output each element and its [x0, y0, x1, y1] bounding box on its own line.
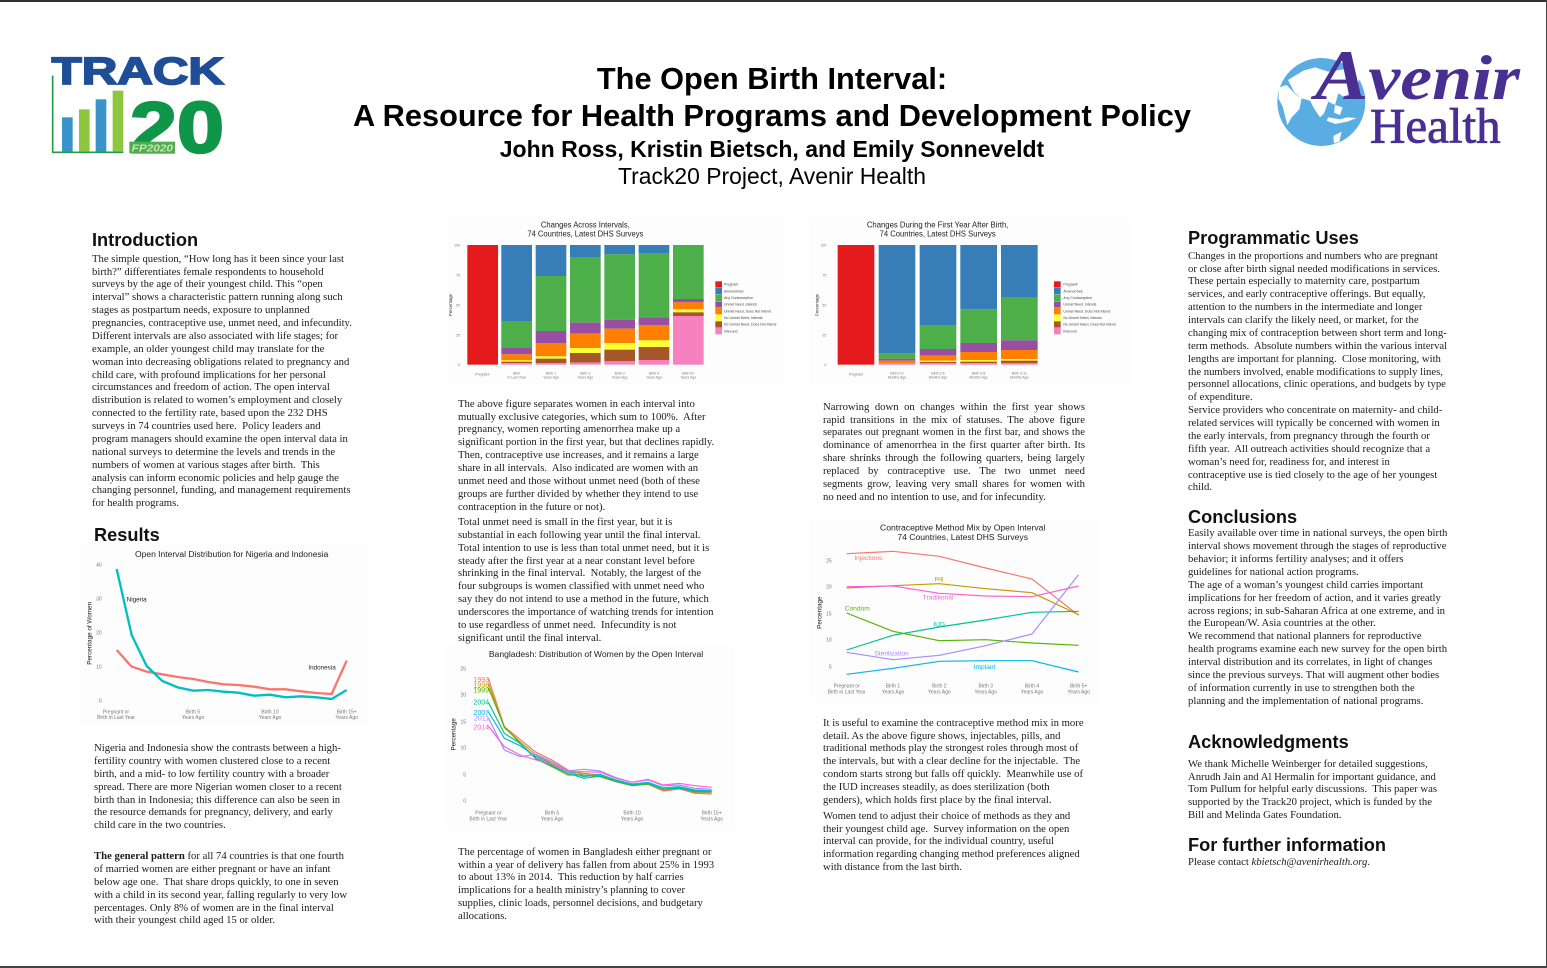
text: conclusions: Easily available over time in national surveys, the open birth	[1188, 527, 1447, 539]
text: Nigeria and Indonesia contrast: Nigeria and Indonesia show the contrasts between a high-	[94, 742, 341, 754]
text: unmet need: substantial in each following year until the final interval.	[458, 529, 700, 541]
line chart: contraceptive method mix: Years Ago	[974, 690, 997, 696]
stacked bar chart: changes across intervals: Birth	[513, 371, 520, 375]
line chart: Nigeria and Indonesia: Years Ago	[335, 715, 358, 721]
line chart: Nigeria and Indonesia: 40	[96, 563, 102, 569]
text: programmatic uses: intervals can clarify the likely need, or market, for the	[1188, 314, 1419, 326]
text: unmet need: Total unmet need is small in the first year, but it is	[458, 516, 672, 528]
stacked bar chart: changes across intervals: 74 Countries, Latest DHS Surveys	[527, 229, 643, 238]
text: conclusions: since the previous surveys. That will augment other bodies	[1188, 669, 1439, 681]
text: figure explanation: unmet need and those without unmet need (both of these	[458, 475, 700, 487]
text: unmet need	[458, 516, 714, 644]
line chart: Bangladesh: Years Ago	[541, 817, 564, 823]
text: figure explanation: share in all intervals. Also indicated are women with an	[458, 462, 698, 474]
text: introduction: birth?” differentiates female respondents to household	[92, 266, 324, 278]
text: general pattern: with their youngest child aged 15 or older.	[94, 914, 275, 926]
line chart: Bangladesh: 15	[460, 719, 466, 725]
legend: No Unmet Need, Intends	[724, 316, 763, 320]
stacked bar chart: first year after birth: 25	[822, 333, 826, 337]
text: conclusions: behavior; it informs fertility analyses; and it offers	[1188, 553, 1404, 565]
line chart: contraceptive method mix: Birth 5+	[1070, 684, 1087, 690]
text: programmatic uses: related services will typically be concerned with women in	[1188, 417, 1440, 429]
stacked bar chart: first year after birth: 50	[822, 303, 826, 307]
text: conclusions	[1188, 527, 1448, 707]
text: contact: Please contact kbietsch@avenirhealth.org.	[1188, 856, 1370, 868]
text: conclusions: across regions; in sub-Saharan Africa at one extreme, and in	[1188, 605, 1445, 617]
bars	[838, 245, 1038, 365]
heading: Results: Results	[94, 525, 160, 545]
text: programmatic uses: child.	[1188, 481, 1212, 493]
text: programmatic uses: These pertain especially to maternity care, postpartum	[1188, 275, 1420, 287]
text: Nigeria and Indonesia contrast: birth, and a mid- to low fertility country with a broader	[94, 768, 329, 780]
line chart: Nigeria and Indonesia: Years Ago	[182, 715, 205, 721]
stacked bar chart: first year after birth: Percentage	[814, 293, 819, 316]
text: programmatic uses: the early intervals, from pregnancy through the fourth or	[1188, 430, 1430, 442]
stacked bar chart: first year after birth	[814, 221, 1116, 380]
line chart: contraceptive method mix: Implant	[974, 664, 996, 671]
logo: Track20: TRACK	[52, 51, 225, 93]
text: programmatic uses: attention to the numbers in the intermediate and longer	[1188, 301, 1422, 313]
text: first year transitions	[823, 401, 1085, 503]
logo: Avenir Health	[1277, 37, 1522, 154]
text: introduction: child care, with profound implications for her personal	[92, 369, 326, 381]
text: first year transitions: separates out pregnant women in the first bar, and shows the	[823, 426, 1085, 438]
stacked bar chart: first year after birth: Changes During the First Year After Birth,	[867, 221, 1009, 230]
stacked bar chart: first year after birth: Months Ago	[929, 376, 947, 380]
text: introduction: numbers of women at various stages after birth. This	[92, 459, 320, 471]
text: first year transitions: rapid transitions in the mix of statuses. The above figure	[823, 414, 1085, 426]
line chart: contraceptive method mix: Condom	[845, 606, 870, 613]
line chart: Bangladesh: Years Ago	[700, 817, 723, 823]
text: conclusions: health programs examine each new survey for the open birth	[1188, 643, 1447, 655]
line chart: contraceptive method mix: 25	[826, 558, 832, 564]
text: programmatic uses: Changes in the proportions and numbers who are pregnant	[1188, 250, 1438, 262]
text: method mix detail: condom starts strong but falls off quickly. Meanwhile use of	[823, 768, 1083, 780]
stacked bar chart: changes across intervals: 75	[456, 273, 460, 277]
line chart: contraceptive method mix: Birth in Last Year	[828, 690, 866, 696]
legend: Infecund	[724, 329, 737, 333]
text: introduction: The simple question, “How long has it been since your last	[92, 253, 344, 265]
text: introduction: example, an older youngest child may translate for the	[92, 343, 324, 355]
text: programmatic uses: woman’s need for, readiness for, and interest in	[1188, 456, 1390, 468]
line chart: Bangladesh: 1993	[473, 677, 489, 684]
text: unmet need: shrinking in the final interval. Notably, the largest of the	[458, 567, 701, 579]
line chart: Nigeria and Indonesia: Nigeria	[127, 597, 147, 604]
stacked bar chart: first year after birth: Months Ago	[1010, 376, 1029, 380]
line chart: Bangladesh: 5	[463, 772, 466, 778]
stacked bar chart: first year after birth: Birth 9-11	[1012, 371, 1027, 375]
legend: No Unmet Need, Does Not Intend	[1063, 323, 1116, 327]
logo: Avenir Health: Health	[1370, 99, 1501, 154]
line chart: contraceptive method mix: Years Ago	[928, 690, 951, 696]
text: conclusions: The age of a woman’s youngest child carries important	[1188, 579, 1423, 591]
text: programmatic uses	[1188, 250, 1447, 493]
line chart: Nigeria and Indonesia: 0	[99, 699, 102, 705]
line chart: contraceptive method mix: IUD	[933, 621, 945, 628]
line chart: Nigeria and Indonesia: Open Interval Distribution for Nigeria and Indonesia	[135, 550, 329, 559]
text: conclusions: We recommend that national planners for reproductive	[1188, 630, 1422, 642]
stacked bar chart: first year after birth: 100	[820, 243, 826, 247]
line chart: Bangladesh: Years Ago	[621, 817, 644, 823]
line chart: contraceptive method mix: Pill	[935, 576, 944, 583]
stacked bar chart: changes across intervals: 100	[454, 243, 460, 247]
line chart: Bangladesh: 0	[463, 799, 466, 805]
text: general pattern: of married women are either pregnant or have an infant	[94, 863, 331, 875]
text: adjusting methods: their youngest child age. Survey information on the open	[823, 823, 1069, 835]
line chart: Bangladesh: 10	[460, 746, 466, 752]
title: The Open Birth Interval:	[597, 61, 947, 96]
text: programmatic uses: fifth year. All outreach activities should recognize that a	[1188, 443, 1430, 455]
stacked bar chart: changes across intervals: Percentage	[448, 293, 453, 316]
line chart: Nigeria and Indonesia: Birth in Last Year	[97, 715, 135, 721]
affiliation: Track20 Project, Avenir Health	[618, 163, 926, 189]
text: figure explanation: significant portion in the first year, but that declines rapidly.	[458, 436, 714, 448]
text: introduction: changing personnel, funding, and management requirements	[92, 484, 350, 496]
text: adjusting methods: with distance from the last birth.	[823, 861, 962, 873]
text: method mix detail: genders), which holds first place by the final interval.	[823, 794, 1052, 806]
text: programmatic uses: term methods. Absolute numbers within the various interval	[1188, 340, 1447, 352]
text: first year transitions: dominance of amenorrhea in the first quarter after birth. Its	[823, 439, 1085, 451]
text: general pattern: The general pattern for all 74 countries is that one fourth	[94, 850, 344, 862]
text: unmet need: Total intention to use is less than total unmet need, but it is	[458, 542, 709, 554]
line chart: Bangladesh: Percentage	[451, 718, 458, 751]
line chart: contraceptive method mix	[817, 524, 1090, 696]
text: Nigeria and Indonesia contrast: birth than in Indonesia; this difference can also be seen in	[94, 794, 340, 806]
line chart: Nigeria and Indonesia: Indonesia	[308, 664, 336, 671]
line chart: Nigeria and Indonesia	[87, 550, 358, 721]
heading: Acknowledgments: Acknowledgments	[1188, 732, 1349, 752]
text: acknowledgments: We thank Michelle Weinberger for detailed suggestions,	[1188, 758, 1428, 770]
text: acknowledgments: Anrudh Jain and Al Hermalin for important guidance, and	[1188, 771, 1436, 783]
text: first year transitions: Narrowing down on changes within the first year shows	[823, 401, 1085, 413]
line chart: contraceptive method mix: 10	[826, 638, 832, 644]
stacked bar chart: first year after birth: Birth 3-5	[931, 371, 945, 375]
text: conclusions: the European/W. Asia countries at the other.	[1188, 617, 1376, 629]
text: Bangladesh: allocations.	[458, 910, 507, 922]
legend: Pregnant	[724, 283, 738, 287]
text: Bangladesh: The percentage of women in Bangladesh either pregnant or	[458, 846, 711, 858]
stacked bar chart: changes across intervals: Years Ago	[577, 376, 593, 380]
text: conclusions: implications for her freedom of action, and it varies greatly	[1188, 592, 1441, 604]
text: acknowledgments: Tom Pullum for helpful early discussions. This paper was	[1188, 783, 1437, 795]
text: introduction: interval” shows a characteristic pattern running along such	[92, 291, 343, 303]
stacked bar chart: changes across intervals: 50	[456, 303, 460, 307]
stacked bar chart: first year after birth: Birth 0-2	[890, 371, 904, 375]
line chart: contraceptive method mix: Years Ago	[1021, 690, 1044, 696]
text: adjusting methods: interval can provide, for the individual country, useful	[823, 835, 1054, 847]
text: unmet need: four subgroups is women classified with unmet need who	[458, 580, 704, 592]
line chart: Bangladesh: 1999	[473, 688, 489, 695]
stacked bar chart: first year after birth: Months Ago	[969, 376, 988, 380]
line chart: Nigeria and Indonesia: Birth 5	[186, 709, 200, 715]
text: programmatic uses: Service providers who concentrate on maternity- and child-	[1188, 404, 1442, 416]
logo: Track20: 20	[130, 88, 224, 169]
legend: Infecund	[1063, 329, 1077, 333]
text: Nigeria and Indonesia contrast	[94, 742, 342, 831]
legend: Pregnant	[1063, 283, 1078, 287]
heading: Conclusions: Conclusions	[1188, 506, 1297, 526]
text: introduction: surveys by the age of their youngest child. This “open	[92, 278, 323, 290]
logo: Track20: FP2020	[132, 143, 173, 154]
text: introduction: distribution is related to women’s employment and closely	[92, 394, 342, 406]
text: unmet need: to use regardless of unmet need. Infecundity is not	[458, 619, 676, 631]
text: introduction: analysis can inform economic policies and help gauge the	[92, 472, 339, 484]
line chart: Bangladesh: 2007	[473, 710, 489, 717]
line chart: Nigeria and Indonesia: 10	[96, 665, 102, 671]
title: A Resource for Health Programs and Development Policy	[353, 98, 1191, 133]
text: first year transitions: no need and no intention to use, and for infecundity.	[823, 491, 1046, 503]
text: Nigeria and Indonesia contrast: fertility country with women clustered close to a recent	[94, 755, 330, 767]
text: unmet need: significant until the final interval.	[458, 632, 601, 644]
line chart: contraceptive method mix: Birth 4	[1025, 684, 1039, 690]
text: adjusting methods: Women tend to adjust their choice of methods as they and	[823, 810, 1070, 822]
text: introduction: woman into decreasing obligations related to pregnancy and	[92, 356, 349, 368]
stacked bar chart: changes across intervals: Pregnant	[475, 372, 489, 376]
text: general pattern: below age one. That share drops quickly, to one in seven	[94, 876, 339, 888]
text: figure explanation: mutually exclusive categories, which sum to 100%. After	[458, 411, 706, 423]
text: Bangladesh: within a year of delivery has fallen from about 25% in 1993	[458, 859, 714, 871]
text: figure explanation: The above figure separates women in each interval into	[458, 398, 695, 410]
legend: Unmet Need, Intends	[1063, 303, 1097, 307]
stacked bar chart: changes across intervals: Birth 5+	[682, 371, 694, 375]
stacked bar chart: changes across intervals: Birth 1	[546, 371, 556, 375]
stacked bar chart: changes across intervals: Birth 4	[649, 371, 659, 375]
text: general pattern: with a child in its second year, falling regularly to very low	[94, 889, 347, 901]
stacked bar chart: changes across intervals: 0	[458, 363, 460, 367]
text: acknowledgments: supported by the Track20 project, which is funded by the	[1188, 796, 1432, 808]
line chart: Nigeria and Indonesia: 30	[96, 597, 102, 603]
stacked bar chart: changes across intervals: Years Ago	[680, 376, 696, 380]
line chart: Bangladesh: Bangladesh: Distribution of Women by the Open Interval	[489, 650, 703, 659]
stacked bar chart: first year after birth: Months Ago	[888, 376, 906, 380]
text: programmatic uses: lengths are important for planning. Close monitoring, with	[1188, 353, 1441, 365]
stacked bar chart: changes across intervals	[448, 221, 776, 380]
stacked bar chart: changes across intervals: in Last Year	[508, 376, 527, 380]
text: introduction: surveys in 74 countries used here. Policy leaders and	[92, 420, 321, 432]
text: Bangladesh: to about 13% in 2014. This reduction by half carries	[458, 871, 684, 883]
text: conclusions: interval distribution and its correlates, in light of changes	[1188, 656, 1432, 668]
bars	[467, 245, 704, 365]
title	[353, 61, 1191, 133]
text: introduction: circumstances and freedom of action. The open interval	[92, 381, 330, 393]
text: introduction: pregnancies, contraceptive use, unmet need, and infecundity.	[92, 317, 352, 329]
line chart: contraceptive method mix: Contraceptive Method Mix by Open Interval	[880, 524, 1046, 533]
stacked bar chart: first year after birth: Birth 6-8	[972, 371, 985, 375]
line chart: Nigeria and Indonesia: Pregnant or	[103, 709, 129, 715]
line chart: contraceptive method mix: Sterilization	[874, 650, 909, 657]
legend: Unmet Need, Does Not Intend	[1063, 309, 1110, 313]
text: programmatic uses: personnel allocations, clinic operations, and budgets by type	[1188, 378, 1446, 390]
text: acknowledgments: Bill and Melinda Gates Foundation.	[1188, 809, 1341, 821]
line chart: Nigeria and Indonesia: Birth 15+	[337, 709, 357, 715]
text: Bangladesh: supplies, clinic loads, personnel decisions, and budgetary	[458, 897, 703, 909]
legend: Unmet Need, Does Not Intend	[724, 309, 771, 313]
text: figure explanation: contraception in the future or not).	[458, 501, 605, 513]
text: figure explanation: groups are further divided by whether they intend to use	[458, 488, 698, 500]
text: programmatic uses: the numbers involved, enable modifications to supply lines,	[1188, 366, 1443, 378]
stacked bar chart: changes across intervals: Changes Across Intervals,	[541, 221, 630, 230]
text: method mix detail: the intervals, but with a clear decline for the injectable. The	[823, 755, 1080, 767]
text: general pattern: percentages. Only 8% of women are in the final interval	[94, 902, 334, 914]
text: programmatic uses: of expenditure.	[1188, 391, 1253, 403]
text: programmatic uses: contraceptive use is tied closely to the age of her youngest	[1188, 469, 1437, 481]
line chart: Bangladesh: Birth in Last Year	[469, 817, 508, 823]
line chart: Bangladesh: Birth 10	[623, 811, 641, 817]
line chart: Bangladesh: 2004	[473, 700, 489, 707]
text: introduction: national surveys to determine the levels and trends in the	[92, 446, 335, 458]
line chart: contraceptive method mix: Percentage	[817, 596, 824, 629]
legend: No Unmet Need, Intends	[1063, 316, 1102, 320]
text: programmatic uses: services, and early contraceptive offerings. But equally,	[1188, 288, 1425, 300]
text: introduction	[92, 253, 352, 509]
line chart: contraceptive method mix: 15	[826, 611, 832, 617]
line chart: Nigeria and Indonesia: 20	[96, 631, 102, 637]
line chart: contraceptive method mix: 74 Countries, Latest DHS Surveys	[897, 533, 1028, 542]
text: conclusions: planning and the implementation of national programs.	[1188, 695, 1423, 707]
line chart: contraceptive method mix: Injections	[854, 555, 883, 562]
text: figure explanation	[458, 398, 714, 513]
logo: Track20	[51, 51, 226, 169]
line chart: contraceptive method mix: Birth 2	[932, 684, 947, 690]
line chart: Bangladesh	[451, 650, 723, 823]
text: introduction: program managers should examine the open interval data in	[92, 433, 348, 445]
legend	[1054, 281, 1116, 334]
text: first year transitions: replaced by contraceptive use. The two unmet need	[823, 465, 1085, 477]
text: unmet need: say they do not intend to use a method in the future, which	[458, 593, 709, 605]
text: conclusions: guidelines for national action programs.	[1188, 566, 1359, 578]
line chart: Bangladesh: 1996	[473, 682, 489, 689]
legend: Any Contraception	[1063, 296, 1092, 300]
text: figure explanation: pregnancy, women reporting amenorrhea make up a	[458, 423, 680, 435]
line chart: contraceptive method mix: Birth 1	[886, 684, 900, 690]
line chart: Bangladesh: 2014	[473, 724, 489, 731]
stacked bar chart: changes across intervals: Years Ago	[543, 376, 559, 380]
stacked bar chart: changes across intervals: 25	[456, 333, 460, 337]
line chart: Nigeria and Indonesia: Birth 10	[261, 709, 279, 715]
text: introduction: for health programs.	[92, 497, 179, 509]
text: introduction: connected to the fertility rate, based upon the 232 DHS	[92, 407, 328, 419]
text: acknowledgments	[1188, 758, 1437, 821]
text: adjusting methods	[823, 810, 1080, 873]
line chart: Nigeria and Indonesia: Percentage of Women	[87, 601, 94, 665]
text: figure explanation: Then, contraceptive use increases, and it remains a large	[458, 449, 699, 461]
line chart: Bangladesh: 20	[460, 693, 466, 699]
stacked bar chart: changes across intervals: Years Ago	[646, 376, 662, 380]
line chart: contraceptive method mix: Traditional	[923, 595, 954, 602]
text: unmet need: underscores the importance of watching trends for intention	[458, 606, 714, 618]
legend: Amenorrheic	[1063, 289, 1083, 293]
line chart: Bangladesh: Pregnant or	[475, 811, 502, 817]
line chart: Bangladesh: Birth 5	[545, 811, 559, 817]
text: first year transitions: share shrinks through the following quarters, being largely	[823, 452, 1085, 464]
text: Bangladesh	[458, 846, 714, 922]
text: conclusions: interval shows movement through the stages of reproductive	[1188, 540, 1447, 552]
stacked bar chart: changes across intervals: Birth 3	[615, 371, 625, 375]
line chart: Nigeria and Indonesia: Years Ago	[259, 715, 282, 721]
text: method mix detail: the IUD increases steadily, as does sterilization (both	[823, 781, 1050, 793]
stacked bar chart: changes across intervals: Birth 2	[580, 371, 590, 375]
text: Bangladesh: implications for a health ministry’s planning to cover	[458, 884, 685, 896]
heading: Programmatic Uses: Programmatic Uses	[1188, 228, 1359, 248]
heading: For further information: For further information	[1188, 834, 1386, 854]
stacked bar chart: first year after birth: 0	[824, 363, 826, 367]
stacked bar chart: first year after birth: 74 Countries, Latest DHS Surveys	[880, 229, 996, 238]
legend: Unmet Need, Intends	[724, 303, 757, 307]
legend: Any Contraception	[724, 296, 753, 300]
text: Nigeria and Indonesia contrast: spread. There are more Nigerian women closer to a recent	[94, 781, 342, 793]
stacked bar chart: first year after birth: 75	[822, 273, 826, 277]
text: adjusting methods: information regarding changing method preferences aligned	[823, 848, 1080, 860]
text: method mix detail	[823, 717, 1084, 806]
text: programmatic uses: or close after birth signal needed modifications in services.	[1188, 263, 1440, 275]
legend: No Unmet Need, Does Not Intend	[724, 323, 776, 327]
heading: Introduction: Introduction	[92, 230, 198, 250]
text: introduction: Different intervals are also associated with life stages; for	[92, 330, 338, 342]
line chart: Bangladesh: 25	[460, 666, 466, 672]
stacked bar chart: first year after birth: Pregnant	[849, 372, 863, 376]
text: general pattern	[94, 850, 348, 926]
line chart: contraceptive method mix: Years Ago	[1067, 690, 1090, 696]
text: conclusions: of information currently in use to strengthen both the	[1188, 682, 1415, 694]
line chart: contraceptive method mix: Years Ago	[882, 690, 905, 696]
line chart: contraceptive method mix: Pregnant or	[834, 684, 860, 690]
text: method mix detail: It is useful to examine the contraceptive method mix in more	[823, 717, 1084, 729]
line chart: Bangladesh: Birth 15+	[702, 811, 722, 817]
authors: John Ross, Kristin Bietsch, and Emily Sonneveldt	[500, 136, 1044, 162]
line chart: Bangladesh: 2011	[474, 716, 489, 723]
text: unmet need: steady after the first year at a near constant level before	[458, 555, 695, 567]
line chart: contraceptive method mix: 5	[829, 664, 832, 670]
legend	[715, 281, 776, 334]
legend: Amenorrheic	[724, 289, 744, 293]
line chart: contraceptive method mix: Birth 3	[978, 684, 993, 690]
text: first year transitions: segments grow, leaving very small shares for women with	[823, 478, 1085, 490]
text: programmatic uses: changing mix of contraception between short term and long-	[1188, 327, 1447, 339]
stacked bar chart: changes across intervals: Years Ago	[612, 376, 628, 380]
text: method mix detail: traditional methods play the strongest roles through most of	[823, 742, 1078, 754]
line chart: contraceptive method mix: 20	[826, 585, 832, 591]
text: Nigeria and Indonesia contrast: the resource demands for pregnancy, delivery, and early	[94, 806, 333, 818]
logo: Avenir Health: Avenir	[1310, 37, 1522, 115]
text: method mix detail: detail. As the above figure shows, injectables, pills, and	[823, 730, 1060, 742]
text: Nigeria and Indonesia contrast: child care in the two countries.	[94, 819, 226, 831]
text: introduction: stages as postpartum needs, exposure to unplanned	[92, 304, 310, 316]
